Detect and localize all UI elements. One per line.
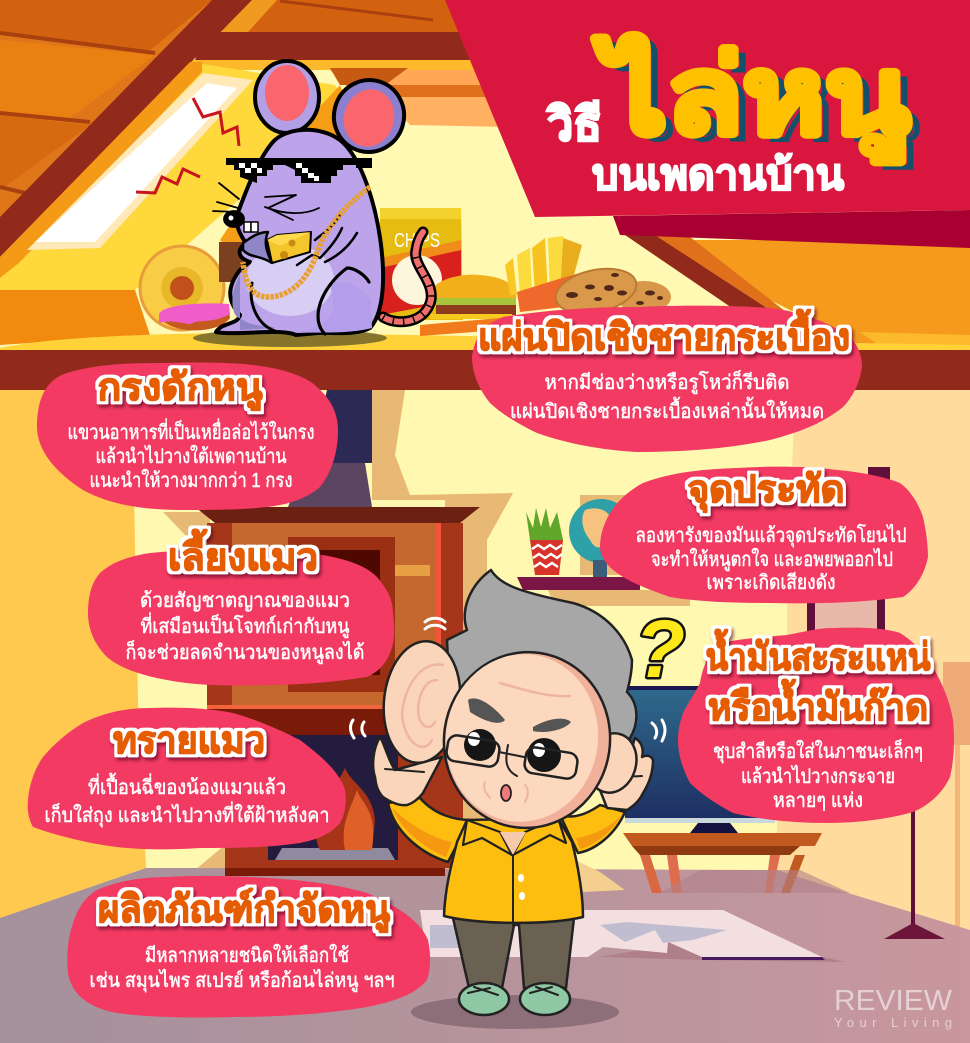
carpet [420, 860, 845, 962]
background: room walls [0, 390, 970, 950]
title: main word: ไล่หนู [592, 34, 910, 163]
body text: แล้วนำไปวางใต้เพดานบ้าน [96, 445, 287, 468]
heading: กรงดักหนู [98, 367, 263, 411]
icon: chips bag [380, 208, 463, 320]
watermark logo [834, 985, 953, 1030]
rat gold chain [243, 187, 370, 297]
heading: แผ่นปิดเชิงชายกระเบื้อง [478, 309, 850, 359]
body text: ลองหารังของมันแล้วจุดประทัดโยนไป [636, 524, 906, 548]
body text [126, 590, 364, 665]
man sleeves [388, 798, 625, 862]
rat belly [246, 244, 334, 316]
icon: cookies [552, 262, 671, 320]
man collar [463, 818, 566, 925]
body text: ที่เปื้อนฉี่ของน้องแมวแล้ว [88, 773, 286, 799]
banner panel [445, 0, 970, 217]
bubble [472, 306, 862, 452]
background: attic roof [0, 0, 970, 350]
man big ear [378, 637, 466, 767]
title: main word shadow outline: ไล่หนู [602, 40, 920, 169]
panel: keep a cat [88, 529, 394, 685]
body text: จะทำให้หนูตกใจ และอพยพออกไป [651, 548, 893, 572]
bubble [88, 550, 394, 685]
icon: red zigzag alert marks [136, 98, 239, 193]
rat body [216, 130, 383, 335]
snack pile [140, 208, 671, 336]
floor [0, 868, 970, 1043]
heading: จุดประทัด [688, 469, 844, 513]
icon: sound wave marks [350, 618, 665, 741]
rat teeth [244, 222, 258, 232]
man shirt [444, 818, 583, 923]
body text: แขวนอาหารที่เป็นเหยื่อล่อไว้ในกรง [68, 418, 314, 444]
fireplace [195, 507, 480, 876]
man hands [373, 737, 653, 810]
panel: firecrackers [600, 467, 928, 603]
television and table [623, 686, 850, 893]
rat mascot [193, 61, 431, 347]
body text [510, 369, 824, 423]
heading: ผลิตภัณฑ์กำจัดหนู [98, 888, 390, 933]
shelf with plant and globe [517, 467, 890, 648]
body text: ที่เสมือนเป็นโจทก์เก่ากับหนู [140, 612, 350, 639]
rat sunglasses [226, 158, 372, 183]
man small ear [581, 728, 643, 798]
title: prefix: วิธี [546, 98, 602, 150]
body text: เก็บใส่ถุง และนำไปวางที่ใต้ฝ้าหลังคา [44, 801, 330, 828]
man eyes and glasses [445, 729, 579, 780]
man shoes [459, 983, 570, 1015]
panel: cage trap [37, 362, 338, 510]
banner shadow [613, 210, 970, 248]
icon: burger [420, 275, 516, 336]
icon: chips bag: CHIPS [394, 230, 440, 252]
man eyebrows [468, 698, 571, 732]
man ground shadow [411, 995, 619, 1029]
watermark logo: Your Living [834, 1015, 952, 1030]
heading line 2: หรือน้ำมันก๊าด [708, 679, 928, 729]
body text [68, 418, 314, 492]
panel: cat litter [28, 708, 346, 849]
icon: globe [569, 499, 633, 578]
body text: หากมีช่องว่างหรือรูโหว่ก็รีบติด [544, 369, 790, 395]
bubble [67, 876, 430, 1018]
man face [433, 641, 621, 839]
bubble [600, 467, 928, 603]
body text: แผ่นปิดเชิงชายกระเบื้องเหล่านั้นให้หมด [510, 397, 824, 423]
rat ears [255, 61, 412, 160]
icon: potted plant [526, 508, 563, 575]
body text [713, 738, 923, 812]
icon: fries [505, 236, 582, 312]
man trousers [453, 918, 574, 988]
body text: ก็จะช่วยลดจำนวนของหนูลงได้ [126, 639, 364, 665]
heading: ทรายแมว [113, 720, 265, 762]
body text: แล้วนำไปวางกระจาย [741, 765, 895, 788]
rat paws [243, 232, 272, 263]
panel: rodent products [67, 876, 430, 1018]
body text: หลายๆ แห่ง [773, 790, 863, 812]
body text: แนะนำให้วางมากกว่า 1 กรง [90, 469, 292, 492]
title banner [445, 0, 970, 248]
body text: ชุบสำลีหรือใส่ในภาชนะเล็กๆ [713, 738, 923, 764]
man hair [447, 570, 636, 750]
man mascot [373, 570, 653, 1029]
bubble [28, 708, 346, 849]
body text [90, 944, 394, 993]
body text: มีหลากหลายชนิดให้เลือกใช้ [145, 944, 349, 967]
title: subtitle: บนเพดานบ้าน [592, 151, 844, 198]
rat ground shadow [193, 329, 387, 347]
rat tail [383, 232, 431, 322]
body text [636, 524, 906, 594]
watermark logo: REVIEW [834, 985, 953, 1017]
bubble [678, 628, 954, 823]
body text: เพราะเกิดเสียงดัง [706, 572, 836, 594]
bubble [37, 362, 338, 510]
body text: ด้วยสัญชาตญาณของแมว [140, 590, 350, 612]
icon: donuts [140, 246, 230, 330]
icon: question mark: ? [635, 604, 685, 695]
background: shelf and beam [0, 333, 970, 390]
heading line 1: น้ำมันสะระแหน่ [706, 629, 931, 679]
floor lamp [884, 800, 945, 939]
rat cheese [267, 232, 311, 263]
panel: eave covers [472, 306, 862, 452]
heading: เลี้ยงแมว [168, 529, 318, 579]
body text: เช่น สมุนไพร สเปรย์ หรือก้อนไล่หนู ฯลฯ [90, 969, 394, 993]
man mouth [484, 782, 528, 802]
body text [44, 773, 330, 828]
rat whiskers and nose [213, 183, 319, 227]
panel: mint oil or kerosene [678, 628, 954, 823]
